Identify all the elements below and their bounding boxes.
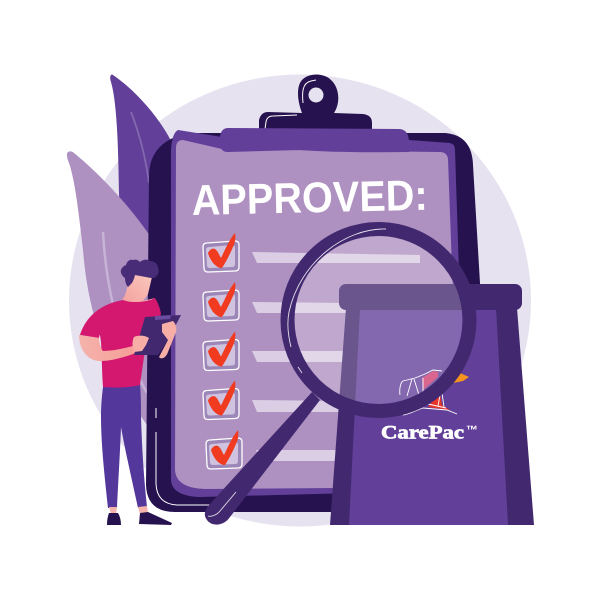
person left arm — [79, 335, 136, 361]
checkbox 2 — [203, 282, 239, 321]
person hair — [121, 260, 159, 287]
CarePac logo mark — [400, 370, 469, 415]
magnifier ring — [288, 229, 470, 411]
background circle — [69, 74, 531, 526]
trademark: ™ — [466, 423, 478, 437]
magnifier handle — [205, 392, 320, 525]
clip bar — [220, 128, 409, 152]
heading: APPROVED: — [191, 172, 428, 225]
checkbox 4 — [203, 380, 239, 420]
magnifier — [205, 229, 470, 525]
checkbox 5 — [206, 430, 242, 469]
paper sheet — [175, 140, 460, 489]
clipboard board — [146, 133, 486, 512]
person clipboard — [134, 315, 181, 355]
person clipboard clip — [155, 315, 171, 320]
bag outer body — [330, 308, 534, 525]
bag front panel — [349, 308, 508, 525]
magnifier highlights — [208, 229, 386, 516]
shopping bag — [330, 284, 534, 525]
clipboard frame — [171, 130, 466, 497]
front leaf — [67, 151, 170, 430]
person neck and face — [122, 274, 155, 306]
CarePac logo text: CarePac — [381, 424, 464, 444]
person shoes — [107, 512, 172, 525]
clipboard clip — [259, 75, 372, 132]
person legs — [101, 385, 147, 508]
clipboard highlight — [156, 408, 210, 505]
checklist lines — [252, 252, 420, 461]
person ankles — [109, 506, 148, 514]
person — [79, 260, 181, 525]
person shirt — [80, 298, 161, 388]
bag handle bar — [339, 284, 522, 310]
clipboard — [146, 75, 486, 512]
magnifier lens glass — [294, 236, 462, 404]
person hands — [132, 321, 176, 358]
checkbox 1 — [203, 233, 239, 272]
checkbox 3 — [203, 332, 239, 370]
back leaf — [110, 74, 200, 300]
